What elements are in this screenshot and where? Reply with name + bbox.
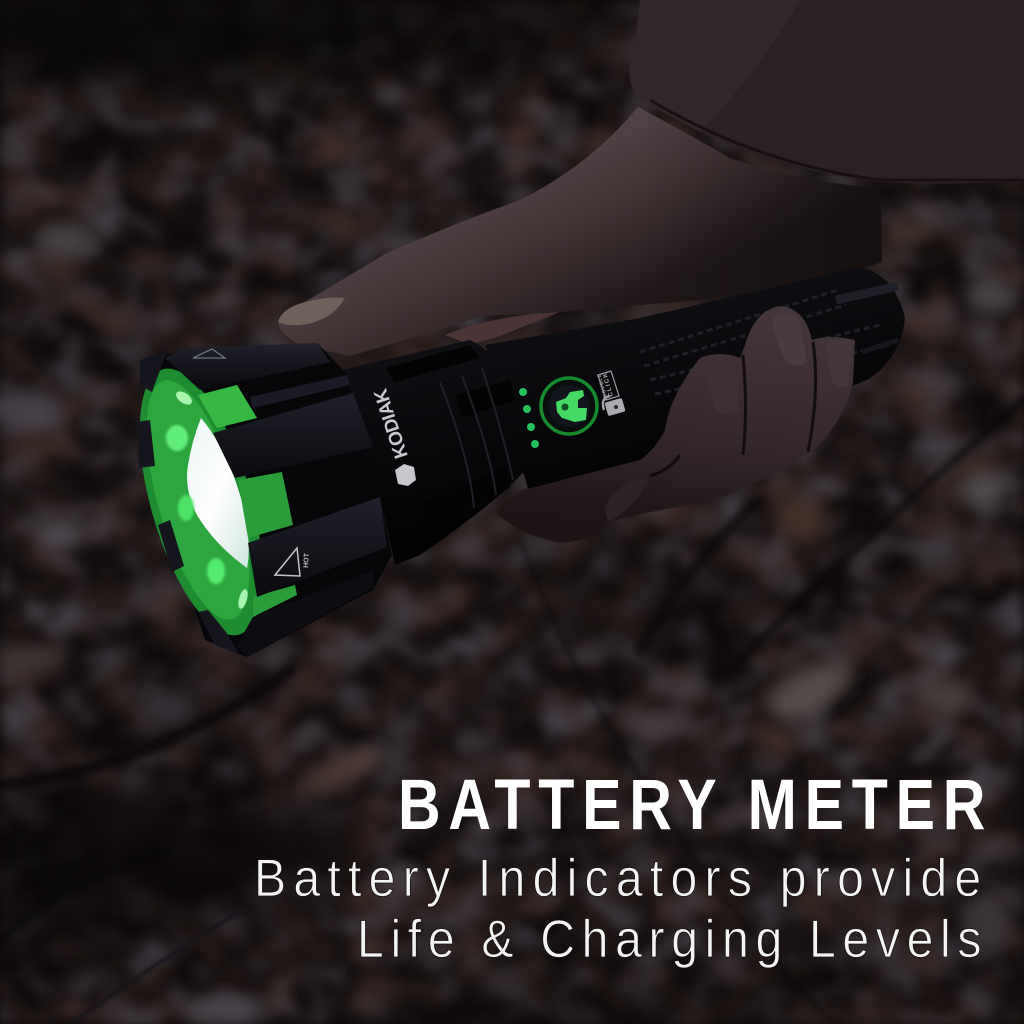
hot warning icon [275,548,311,576]
double click lock icon: DOUBLE [596,373,609,398]
brand logo [370,386,416,486]
brand logo: KODIAK [370,386,413,461]
flashlight tail and grip [485,267,905,495]
battery level indicators [519,388,539,448]
top warning icon [193,349,225,358]
flashlight switch section [519,371,626,448]
knurled grip [640,286,898,394]
double click lock icon: CLICK [602,372,615,397]
fingernails [772,312,807,366]
flashlight head [115,343,392,657]
central lens [187,418,249,568]
hand: back of hand and thumb [278,107,882,356]
subheading line 1: Battery Indicators provide [254,848,981,908]
hand: gripping fingers [497,306,855,542]
green reflector patches [198,385,297,617]
heading: BATTERY METER [398,765,985,844]
power button icon [541,378,597,434]
sleeve [629,0,1024,184]
head fins [165,343,387,657]
green LEDs [166,389,249,610]
hot warning icon: HOT [303,552,311,568]
green light ring [115,356,287,648]
front clamp tabs [137,348,240,655]
subheading line 2: Life & Charging Levels [357,909,981,969]
flashlight collar [342,340,527,565]
double click lock icon [596,371,626,416]
